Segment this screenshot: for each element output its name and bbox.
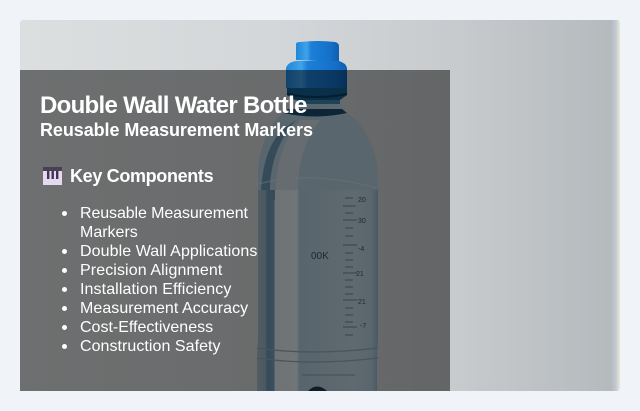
- bullet list: key components: Double Wall Applications: [80, 242, 257, 260]
- subtitle: Reusable Measurement Markers: [40, 120, 313, 140]
- bullet list: key components: Installation Efficiency: [80, 280, 231, 298]
- heading: key components: Key Components: [70, 166, 213, 186]
- icon: water bottle: 20: [358, 197, 366, 204]
- icon: water bottle: 30: [358, 218, 366, 225]
- icon: water bottle: 21: [356, 271, 364, 278]
- text overlay panel: [20, 70, 450, 391]
- bullet list: key components: Markers: [80, 224, 138, 240]
- bullet list: key components: Reusable Measurement: [80, 204, 248, 222]
- bullet list: key components: Cost-Effectiveness: [80, 318, 213, 336]
- icon: water bottle: [257, 41, 378, 391]
- bullet list: key components: Precision Alignment: [80, 262, 222, 278]
- bullet list: key components: [62, 204, 257, 354]
- icon: water bottle: -7: [360, 323, 366, 330]
- title: Double Wall Water Bottle: [40, 92, 307, 119]
- bullet list: key components: Construction Safety: [80, 338, 221, 354]
- icon: water bottle: 21: [358, 299, 366, 306]
- icon: water bottle: -4: [358, 246, 364, 253]
- bullet list: key components: Measurement Accuracy: [80, 300, 248, 316]
- icon: water bottle: 00K: [311, 251, 329, 262]
